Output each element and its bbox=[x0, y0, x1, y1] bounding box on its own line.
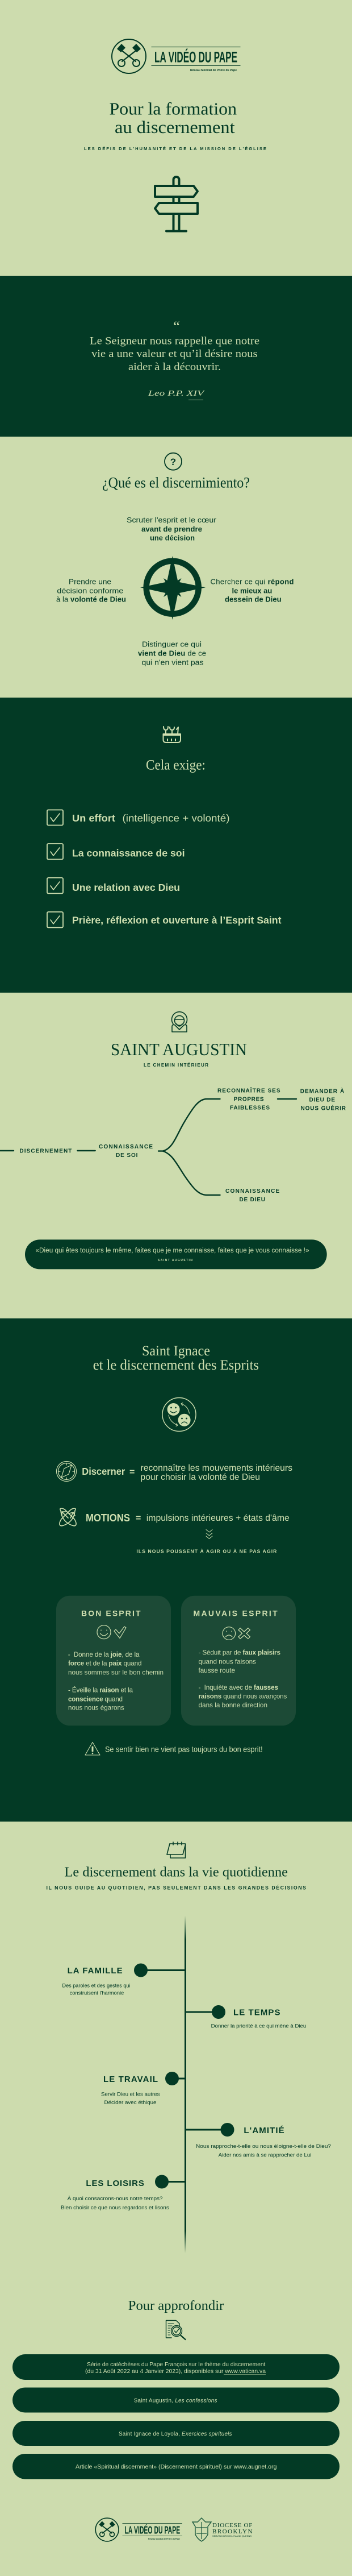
icon: happy and sad faces bbox=[162, 1397, 196, 1432]
checklist item 1 bbox=[47, 810, 229, 826]
signature: Leo P.P. XIV bbox=[148, 389, 205, 398]
definition: motions: MOTIONS bbox=[86, 1512, 130, 1524]
panel: Pope quote bbox=[0, 276, 352, 437]
quotation mark: “ bbox=[173, 318, 180, 335]
icon: compass rose bbox=[140, 556, 206, 620]
text: bottom bbox=[138, 640, 206, 667]
text: right bbox=[210, 577, 294, 604]
panel: daily life bbox=[47, 1842, 331, 2253]
timeline item: time bbox=[186, 2005, 306, 2029]
logo: La Vidéo du Pape bbox=[112, 39, 241, 73]
card: bad spirit: quand nous faisons bbox=[199, 1658, 256, 1665]
definition: discerner: Discerner bbox=[82, 1466, 125, 1477]
icon: basket of tools bbox=[164, 727, 181, 742]
heading: Le discernement dans la vie quotidienne bbox=[65, 1865, 288, 1880]
logo: La Vidéo du Pape small: LA VIDÉO DU PAPE bbox=[125, 2524, 180, 2536]
text: left: décision conforme bbox=[57, 586, 123, 595]
icon: chevrons down bbox=[206, 1529, 212, 1538]
card: good spirit: conscience quand bbox=[68, 1695, 123, 1703]
text: top: une décision bbox=[150, 534, 195, 542]
diagram: path tree: DE SOI bbox=[116, 1152, 138, 1159]
timeline item: family: Des paroles et des gestes qui bbox=[62, 1983, 131, 1989]
definition: discerner bbox=[57, 1461, 292, 1482]
link pill 1: Série de catéchèses du Pape François sur le thème du discernement bbox=[87, 2362, 266, 2368]
panel: what is discernment bbox=[56, 453, 294, 667]
text: bottom: qui n'en vient pas bbox=[142, 658, 204, 667]
heading: Saint Ignace bbox=[142, 1343, 210, 1359]
timeline item: friendship: L'AMITIÉ bbox=[244, 2126, 284, 2135]
definition: discerner: reconnaître les mouvements intérieurs bbox=[141, 1463, 292, 1473]
text: right: le mieux au bbox=[232, 586, 272, 595]
logo: La Vidéo du Pape small bbox=[95, 2518, 182, 2541]
heading: et le discernement des Esprits bbox=[93, 1358, 259, 1373]
diagram: path tree: DIEU DE bbox=[309, 1097, 335, 1103]
link pill 1: (du 31 Août 2022 au 4 Janvier 2023), disponibles sur www.vatican.va bbox=[85, 2368, 266, 2375]
callout: Augustine quote: SAINT AUGUSTIN bbox=[158, 1259, 192, 1262]
heading: Pour approfondir bbox=[128, 2299, 224, 2313]
diagram: path tree: CONNAISSANCE bbox=[225, 1188, 280, 1194]
logo: La Vidéo du Pape: LA VIDÉO DU PAPE bbox=[154, 48, 237, 66]
panel: requirements bbox=[0, 698, 352, 993]
card: bad spirit: MAUVAIS ESPRIT bbox=[193, 1609, 278, 1618]
signature bbox=[148, 389, 205, 400]
icon: frown and cross bbox=[223, 1627, 250, 1640]
definition: discerner: = bbox=[129, 1467, 135, 1477]
icon: question mark bbox=[165, 453, 182, 470]
logo: La Vidéo du Pape: Réseau Mondial de Prière du Pape bbox=[190, 69, 237, 72]
heading bbox=[93, 1343, 259, 1373]
link pill 4: Article «Spiritual discernment» (Discernement spirituel) sur www.augnet.org bbox=[76, 2464, 277, 2470]
text: top: avant de prendre bbox=[141, 525, 202, 533]
card: bad spirit: - Inquiète avec de fausses bbox=[199, 1684, 278, 1691]
text: top bbox=[127, 516, 217, 542]
text: left: Prendre une bbox=[69, 577, 111, 586]
panel: Saint Augustin bbox=[0, 1012, 346, 1269]
checklist item 2: La connaissance de soi bbox=[72, 848, 185, 859]
footer logos bbox=[95, 2518, 252, 2541]
timeline item: leisure: À quoi consacrons-nous notre temps? bbox=[68, 2196, 163, 2201]
checklist item 4 bbox=[47, 912, 282, 928]
card: good spirit bbox=[56, 1596, 171, 1725]
heading: ¿Qué es el discernimiento? bbox=[102, 475, 250, 491]
link pill 3: Saint Ignace de Loyola, Exercices spirituels bbox=[119, 2431, 232, 2437]
text: left: à la volonté de Dieu bbox=[56, 595, 126, 604]
checklist item 1: (intelligence + volonté) bbox=[123, 812, 229, 824]
logo: Diocese of Brooklyn: BROOKLYN bbox=[212, 2528, 252, 2535]
icon: saint with halo bbox=[171, 1012, 187, 1032]
card: bad spirit bbox=[181, 1596, 296, 1725]
icon: signpost bbox=[155, 177, 198, 231]
link pill 2 bbox=[12, 2388, 340, 2413]
timeline item: time: Donner la priorité à ce qui mène à Dieu bbox=[211, 2023, 306, 2029]
title: au discernement bbox=[115, 117, 235, 137]
text: top: Scruter l'esprit et le cœur bbox=[127, 516, 217, 524]
card: good spirit: - Donne de la joie, de la bbox=[68, 1651, 140, 1658]
timeline item: work: LE TRAVAIL bbox=[103, 2075, 158, 2084]
checklist item 2 bbox=[47, 844, 185, 860]
heading: SAINT AUGUSTIN bbox=[111, 1039, 247, 1059]
panel: further reading bbox=[12, 2299, 340, 2479]
quote text: Le Seigneur nous rappelle que notre bbox=[90, 335, 259, 347]
logo: La Vidéo du Pape small: Réseau Mondial de Prière du Pape bbox=[148, 2538, 180, 2540]
timeline bbox=[185, 1915, 186, 2253]
link pill 4 bbox=[12, 2454, 340, 2479]
card: good spirit: force et de la paix quand bbox=[68, 1660, 142, 1667]
timeline item: family: LA FAMILLE bbox=[68, 1966, 123, 1976]
card: good spirit: - Éveille la raison et la bbox=[68, 1687, 133, 1694]
timeline item: work bbox=[101, 2072, 185, 2105]
logo: Diocese of Brooklyn bbox=[192, 2518, 252, 2541]
card: good spirit: nous nous égarons bbox=[68, 1704, 124, 1712]
definition: discerner: pour choisir la volonté de Dieu bbox=[141, 1472, 260, 1482]
text: bottom: vient de Dieu de ce bbox=[138, 649, 206, 658]
timeline item: work: Servir Dieu et les autres bbox=[101, 2091, 160, 2097]
quote text: vie a une valeur et qu’il désire nous bbox=[91, 349, 258, 360]
diagram: path tree: NOUS GUÉRIR bbox=[301, 1104, 346, 1112]
diagram: path tree bbox=[0, 1086, 346, 1203]
card: bad spirit: fausse route bbox=[199, 1667, 235, 1674]
card: good spirit: BON ESPRIT bbox=[81, 1609, 141, 1618]
text: right: dessein de Dieu bbox=[225, 595, 282, 604]
text: right: Chercher ce qui répond bbox=[210, 577, 294, 586]
card: good spirit: nous sommes sur le bon chemin bbox=[68, 1669, 164, 1676]
card: bad spirit: dans la bonne direction bbox=[199, 1702, 267, 1709]
subtitle: LES DÉFIS DE L'HUMANITÉ ET DE LA MISSION DE L'ÉGLISE bbox=[84, 146, 266, 151]
text: they push us: ILS NOUS POUSSENT À AGIR OU À NE PAS AGIR bbox=[136, 1549, 277, 1554]
warning note: Se sentir bien ne vient pas toujours du bon esprit! bbox=[105, 1745, 263, 1754]
diagram: path tree: FAIBLESSES bbox=[230, 1105, 270, 1111]
timeline item: time: LE TEMPS bbox=[233, 2008, 280, 2018]
diagram: path tree: DISCERNEMENT bbox=[19, 1148, 72, 1154]
quote text bbox=[90, 335, 259, 373]
timeline item: leisure bbox=[61, 2175, 185, 2210]
card: bad spirit: raisons quand nous avançons bbox=[199, 1693, 287, 1700]
card: bad spirit: - Séduit par de faux plaisirs bbox=[199, 1649, 280, 1657]
timeline item: work: Décider avec éthique bbox=[104, 2100, 157, 2105]
text: left bbox=[56, 577, 126, 604]
heading: Cela exige: bbox=[146, 757, 206, 773]
timeline item: friendship: Aider nos amis à se rapprocher de Lui bbox=[219, 2152, 311, 2158]
diagram: path tree: RECONNAÎTRE SES bbox=[217, 1086, 280, 1094]
link pill 1 bbox=[12, 2354, 340, 2380]
callout: Augustine quote bbox=[25, 1239, 327, 1269]
icon: calendar bbox=[167, 1842, 185, 1858]
timeline item: friendship: Nous rapproche-t-elle ou nous éloigne-t-elle de Dieu? bbox=[196, 2143, 331, 2149]
timeline item: family bbox=[62, 1964, 185, 1996]
checklist item 4: Prière, réflexion et ouverture à l’Esprit Saint bbox=[72, 915, 282, 926]
icon: compass bbox=[57, 1461, 76, 1482]
timeline item: friendship bbox=[186, 2123, 331, 2158]
icon: document and magnifier bbox=[166, 2321, 185, 2339]
link pill 2: Saint Augustin, Les confessions bbox=[134, 2397, 217, 2404]
diagram: path tree: PROPRES bbox=[234, 1096, 264, 1102]
icon: smile and check bbox=[97, 1625, 126, 1639]
diagram: path tree: CONNAISSANCE bbox=[99, 1144, 153, 1150]
title: Pour la formation bbox=[109, 99, 237, 118]
header section bbox=[84, 39, 266, 231]
timeline item: leisure: Bien choisir ce que nous regardons et lisons bbox=[61, 2205, 169, 2210]
icon: question mark: ? bbox=[170, 457, 176, 467]
link pill 3 bbox=[12, 2421, 340, 2446]
diagram: path tree: DE DIEU bbox=[240, 1197, 265, 1203]
diagram: path tree: DEMANDER À bbox=[300, 1087, 344, 1095]
definition: motions: = bbox=[136, 1513, 141, 1523]
checklist item 3: Une relation avec Dieu bbox=[72, 882, 180, 893]
text: bottom: Distinguer ce qui bbox=[142, 640, 202, 649]
subheading: LE CHEMIN INTÉRIEUR bbox=[144, 1063, 208, 1068]
timeline item: family: construisent l'harmonie bbox=[70, 1990, 124, 1996]
checklist item 1: Un effort bbox=[72, 812, 115, 824]
definition: motions bbox=[60, 1508, 290, 1526]
timeline item: leisure: LES LOISIRS bbox=[86, 2179, 144, 2188]
panel: Saint Ignace bbox=[0, 1318, 352, 1822]
title bbox=[109, 99, 237, 137]
icon: motion arrows bbox=[60, 1508, 76, 1526]
definition: motions: impulsions intérieures + états d'âme bbox=[146, 1513, 290, 1523]
warning note bbox=[85, 1742, 263, 1755]
logo: Diocese of Brooklyn: SERVING BROOKLYN AND QUEENS bbox=[212, 2535, 252, 2537]
logo: Diocese of Brooklyn: DIOCESE OF bbox=[212, 2522, 252, 2529]
quote text: aider à la découvrir. bbox=[128, 362, 221, 373]
subheading: IL NOUS GUIDE AU QUOTIDIEN, PAS SEULEMENT DANS LES GRANDES DÉCISIONS bbox=[47, 1885, 306, 1891]
checklist item 3 bbox=[47, 878, 180, 894]
callout: Augustine quote: «Dieu qui êtes toujours le même, faites que je me connaisse, faites que je vous connaisse !» bbox=[35, 1247, 309, 1254]
